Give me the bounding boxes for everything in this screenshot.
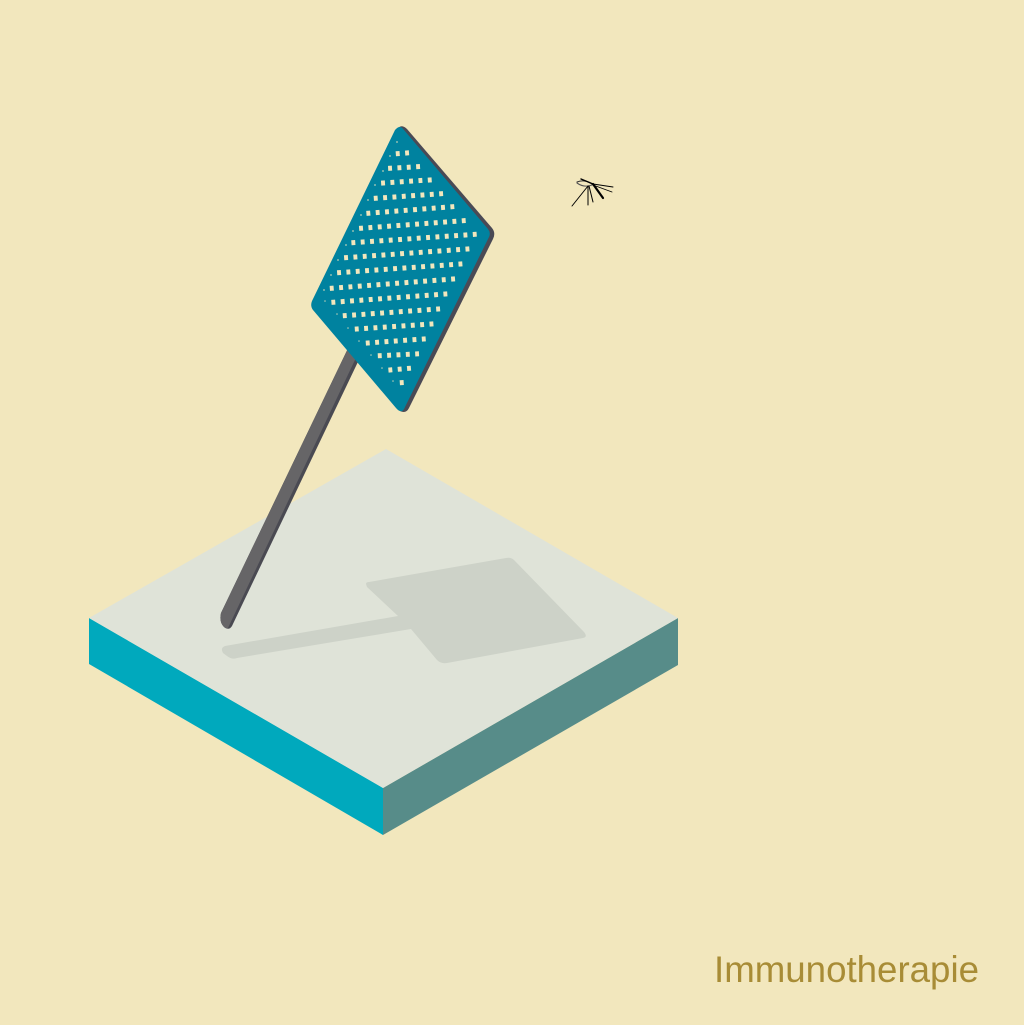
swatter handle [220, 340, 366, 629]
swatter shadow [222, 558, 586, 663]
mesh holes [330, 153, 478, 383]
icon: mosquito [572, 179, 613, 206]
isometric platform [89, 449, 678, 835]
mesh edge specks [323, 141, 398, 382]
swatter head [311, 126, 494, 412]
caption: Immunotherapie [714, 949, 979, 990]
